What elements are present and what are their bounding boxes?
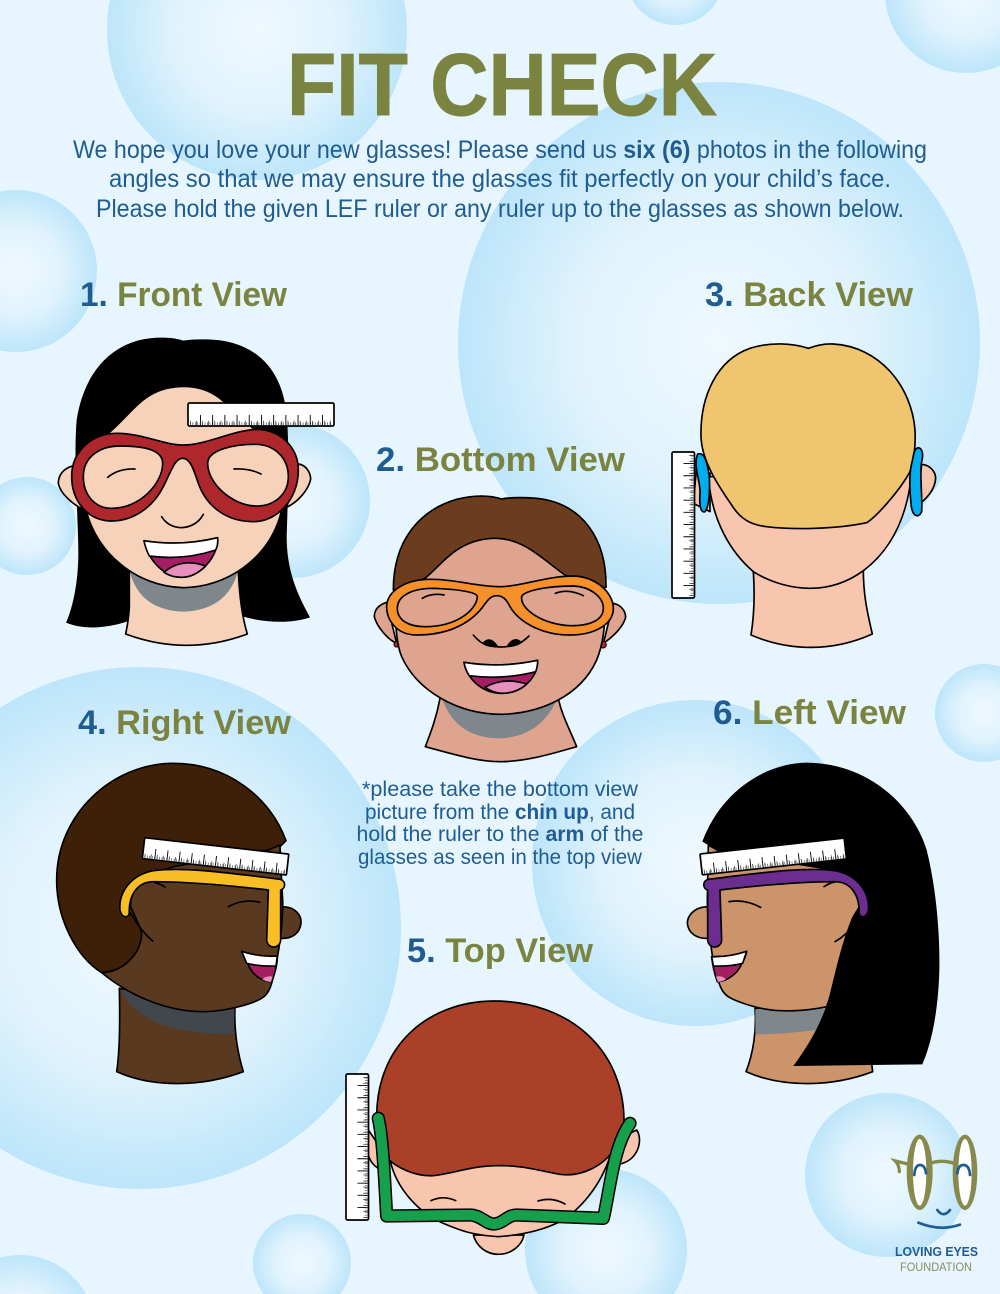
hair [377,1001,624,1176]
ruler [346,1074,368,1220]
neck [126,572,247,645]
blue temple tips [696,448,923,516]
note text: glasses as seen in the top view [358,846,643,869]
ears [58,464,311,509]
note text: hold the ruler to the arm of the [356,823,644,846]
neck [425,698,577,762]
figure: top view [346,1001,639,1254]
heading: front view: 1. Front View [80,276,288,314]
neck [751,570,872,647]
green glasses [378,1118,630,1224]
intro text: We hope you love your new glasses! Please send us six (6) photos in the following [73,136,927,164]
ruler [188,403,334,426]
logo: Loving Eyes Foundation [895,1135,978,1274]
orange glasses [387,576,613,635]
intro text: Please hold the given LEF ruler or any ruler up to the glasses as shown below. [96,195,904,223]
figure: front view [58,338,334,645]
chin [473,1235,524,1254]
heading: top view: 5. Top View [407,932,594,970]
nose [687,907,710,938]
red glasses [72,429,298,522]
hair [702,763,939,1066]
figure: right view [57,763,301,1084]
eye, ear [729,882,855,942]
figure: back view [672,344,936,647]
heading: back view: 3. Back View [705,276,914,314]
figure: left view [687,763,939,1084]
heading: right view: 4. Right View [78,704,292,742]
note text: picture from the chin up, and [365,801,635,824]
neck shadow [755,1008,827,1034]
heading: bottom view: 2. Bottom View [376,441,626,479]
yellow glasses arm [120,869,285,947]
ruler [142,838,289,875]
purple glasses arm [704,869,868,947]
note text: *please take the bottom view [362,778,639,801]
heading: left view: 6. Left View [713,694,907,732]
ears [374,602,626,643]
eyes [431,1198,565,1204]
intro text [73,136,927,223]
ears [366,1130,639,1169]
head [708,473,912,588]
mouth [712,951,747,982]
ruler [672,452,694,598]
note text [356,778,644,869]
face [395,538,605,714]
logo wordmark: LOVING EYES [895,1244,978,1259]
hair [393,496,606,590]
neck shadow [121,990,234,1034]
logo face [914,1165,970,1228]
neck shadow [443,700,557,738]
nose and eyes [108,469,261,528]
earrings [394,641,606,648]
mouth [242,951,277,982]
neck [746,1007,873,1084]
face [707,845,867,1011]
neck [117,988,243,1084]
logo glasses [895,1135,977,1210]
nose [280,907,301,938]
logo: Loving Eyes Foundation: FOUNDATION [900,1260,972,1274]
nose [473,635,529,647]
figure: bottom view [374,496,626,762]
face [80,386,293,588]
hair [66,338,310,627]
face [102,845,283,1012]
intro text: angles so that we may ensure the glasses fit perfectly on your child’s face. [109,165,891,193]
mouth [464,660,538,693]
hair [57,763,286,973]
hair [701,344,915,529]
title: FIT CHECK [287,35,717,134]
ruler [700,838,846,875]
ear, eye [131,883,260,941]
ears [693,464,936,512]
face [390,1157,610,1237]
eyes [422,591,583,598]
neck shadow [130,572,238,612]
mouth [144,538,218,577]
